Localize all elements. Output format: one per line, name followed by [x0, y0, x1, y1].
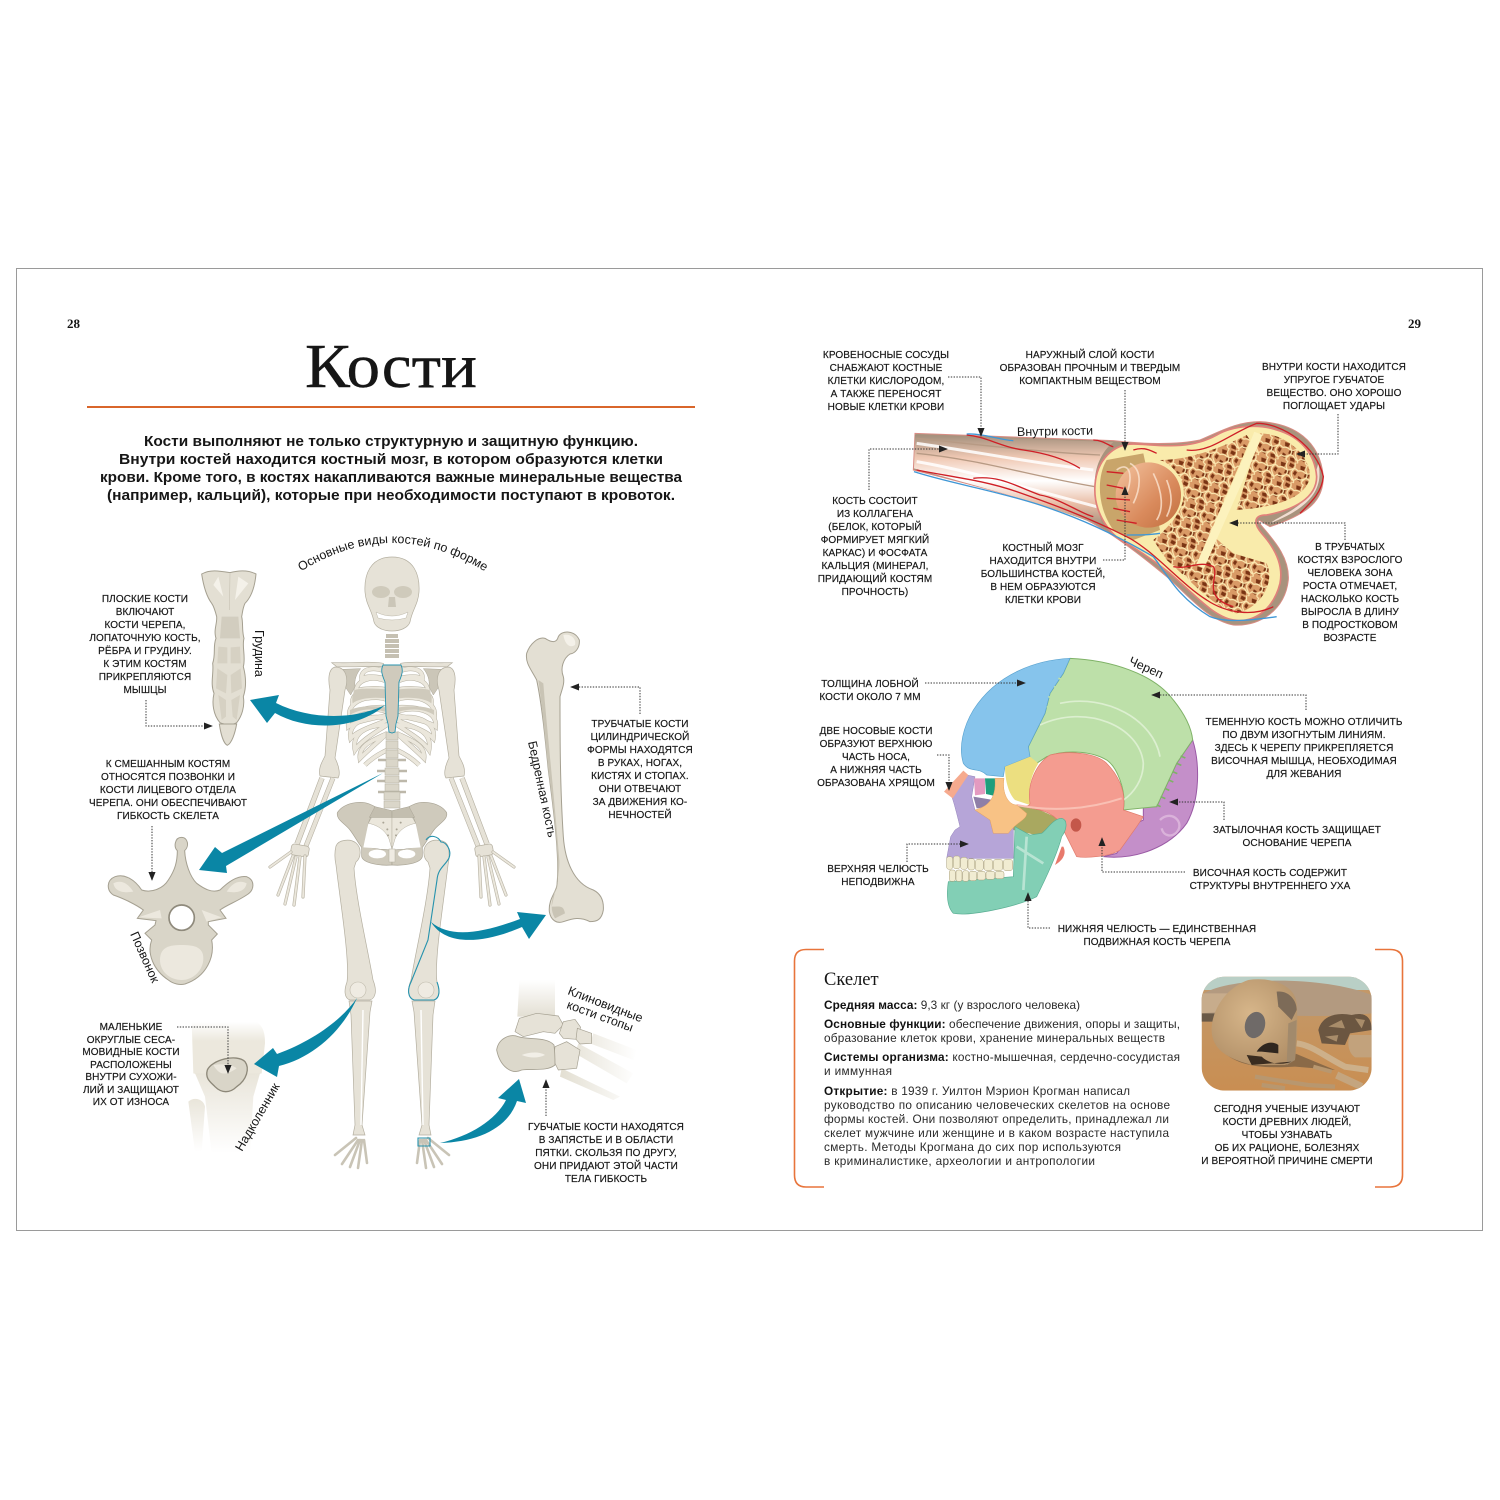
text: tubular bones: [587, 719, 693, 821]
panel facts text: и иммунная: [824, 1064, 892, 1078]
pubic symphysis: [389, 849, 395, 862]
text: collagen: ИЗ КОЛЛАГЕНА: [837, 509, 913, 520]
text: flat bones: МЫШЦЫ: [123, 685, 167, 696]
text: mixed bones: ОТНОСЯТСЯ ПОЗВОНКИ И: [101, 772, 235, 783]
leader: flat bones: [146, 700, 212, 726]
vessels: [917, 423, 1323, 612]
panel facts text: Открытие: в 1939 г. Уилтон Мэрион Крогман написал: [824, 1084, 1130, 1098]
panel facts text: формы костей. Они позволяют определить, принадлежал ли: [824, 1112, 1169, 1126]
panel heading: Скелет: [824, 970, 879, 990]
text: marrow: БОЛЬШИНСТВА КОСТЕЙ,: [981, 567, 1105, 580]
text: flat bones: ПЛОСКИЕ КОСТИ: [102, 594, 188, 605]
text: parietal bone: ДЛЯ ЖЕВАНИЯ: [1267, 769, 1341, 780]
intro text: Кости выполняют не только структурную и защитную функцию.: [144, 433, 638, 450]
text: sesamoid bones: РАСПОЛОЖЕНЫ: [90, 1060, 172, 1071]
text: growth zone: ВОЗРАСТЕ: [1323, 633, 1377, 644]
vertebra illustration: [108, 837, 253, 984]
leader: spongy bones: [545, 1080, 547, 1116]
text: blood vessels: [823, 350, 949, 413]
text: nasal bones: ОБРАЗОВАНА ХРЯЩОМ: [817, 778, 935, 789]
sternum highlighted: [382, 665, 402, 733]
text: mixed bones: [89, 759, 247, 822]
photo caption: И ВЕРОЯТНОЙ ПРИЧИНЕ СМЕРТИ: [1201, 1154, 1373, 1167]
text: sesamoid bones: [82, 1022, 180, 1108]
text: marrow: КЛЕТКИ КРОВИ: [1005, 595, 1081, 606]
arrow: sternum: [250, 695, 385, 725]
text: parietal bone: ВИСОЧНАЯ МЫШЦА, НЕОБХОДИМАЯ: [1211, 756, 1397, 767]
text: frontal bone: КОСТИ ОКОЛО 7 ММ: [819, 692, 921, 703]
text: mixed bones: КОСТИ ЛИЦЕВОГО ОТДЕЛА: [100, 785, 236, 796]
leader: maxilla: [907, 844, 968, 862]
text: flat bones: ПРИКРЕПЛЯЮТСЯ: [99, 672, 191, 683]
text: tubular bones: ЦИЛИНДРИЧЕСКОЙ: [591, 730, 689, 743]
leader: spongy substance: [1297, 414, 1338, 454]
leader: blood vessels: [948, 377, 981, 436]
text: spongy substance: ВНУТРИ КОСТИ НАХОДИТСЯ: [1262, 362, 1406, 373]
text: nasal bones: ОБРАЗУЮТ ВЕРХНЮЮ: [820, 739, 932, 750]
text: parietal bone: [1205, 717, 1403, 780]
photo: ancient skeleton: [1202, 977, 1372, 1091]
text: spongy bones: ТЕЛА ГИБКОСТЬ: [565, 1174, 647, 1185]
text: spongy bones: В ЗАПЯСТЬЕ И В ОБЛАСТИ: [539, 1135, 673, 1146]
intro text: Внутри костей находится костный мозг, в котором образуются клетки: [119, 451, 663, 468]
teeth: [947, 856, 1013, 881]
text: marrow: В НЕМ ОБРАЗУЮТСЯ: [990, 582, 1096, 593]
intro text: крови. Кроме того, в костях накапливаются важные минеральные вещества: [100, 469, 683, 486]
leader: marrow: [1103, 487, 1125, 560]
zygomatic bone: [975, 778, 1027, 833]
text: flat bones: К ЭТИМ КОСТЯМ: [103, 659, 187, 670]
frontal bone: [961, 658, 1070, 777]
cervical spine: [385, 636, 399, 656]
text: outer layer: [1000, 348, 1180, 387]
text: spongy substance: ПОГЛОЩАЕТ УДАРЫ: [1283, 401, 1385, 412]
label: inside the bone: Внутри кости: [1017, 424, 1093, 439]
text: tubular bones: В РУКАХ, НОГАХ,: [598, 758, 682, 769]
photo caption: КОСТИ ДРЕВНИХ ЛЮДЕЙ,: [1223, 1115, 1351, 1128]
label line 1: cuneiform bones: Клиновидные: [566, 984, 645, 1025]
text: nasal bones: ЧАСТЬ НОСА,: [842, 752, 910, 763]
text: collagen: КОСТЬ СОСТОИТ: [832, 496, 918, 507]
curved heading: bone shapes: Основные виды костей по форме: [298, 536, 487, 570]
intro text: [100, 433, 683, 504]
text: blood vessels: НОВЫЕ КЛЕТКИ КРОВИ: [828, 402, 944, 413]
leader: parietal bone: [1152, 695, 1306, 710]
full skeleton: [270, 557, 514, 1168]
text: collagen: [818, 496, 932, 598]
text: sesamoid bones: ОКРУГЛЫЕ СЕСА-: [87, 1035, 175, 1046]
spongy bone: [1153, 435, 1269, 613]
label: femur: Бедренная кость: [525, 740, 559, 839]
foot bones illustration: [497, 980, 637, 1100]
leader: collagen: [869, 449, 947, 490]
text: tubular bones: ЗА ДВИЖЕНИЯ КО-: [593, 797, 687, 808]
sphenoid bone: [1005, 757, 1038, 805]
bone outer body: [913, 422, 1323, 625]
text: occipital bone: [1213, 825, 1381, 849]
arrow: foot: [440, 1079, 526, 1143]
text: collagen: ПРОЧНОСТЬ): [842, 587, 908, 598]
text: outer layer: ОБРАЗОВАН ПРОЧНЫМ И ТВЕРДЫМ: [1000, 363, 1180, 374]
text: frontal bone: ТОЛЩИНА ЛОБНОЙ: [821, 677, 919, 690]
panel facts text: руководство по описанию человеческих скелетов на основе: [824, 1098, 1170, 1112]
leader: tubular bones: [571, 687, 640, 714]
text: occipital bone: ОСНОВАНИЕ ЧЕРЕПА: [1242, 838, 1352, 849]
text: flat bones: [89, 594, 201, 696]
leader: mandible: [1028, 893, 1050, 928]
text: tubular bones: КИСТЯХ И СТОПАХ.: [591, 771, 689, 782]
text: outer layer: КОМПАКТНЫМ ВЕЩЕСТВОМ: [1019, 376, 1161, 387]
panel facts text: образование клеток крови, хранение минеральных веществ: [824, 1031, 1165, 1045]
arrow: femur: [431, 912, 546, 940]
text: flat bones: ЛОПАТОЧНУЮ КОСТЬ,: [89, 633, 201, 644]
right bracket: [1375, 950, 1402, 1187]
text: tubular bones: ТРУБЧАТЫЕ КОСТИ: [591, 719, 689, 730]
text: occipital bone: ЗАТЫЛОЧНАЯ КОСТЬ ЗАЩИЩАЕТ: [1213, 825, 1381, 836]
photo caption: [1201, 1104, 1373, 1167]
text: growth zone: В ТРУБЧАТЫХ: [1315, 542, 1385, 553]
label: skull: Череп: [1127, 654, 1165, 681]
page number 28: 28: [67, 316, 80, 331]
femoral head: [1116, 462, 1181, 528]
text: mandible: [1058, 924, 1256, 948]
sternum bone illustration: [202, 571, 256, 745]
occipital bone: [1103, 740, 1198, 857]
title rule: [87, 406, 695, 408]
text: spongy bones: ОНИ ПРИДАЮТ ЭТОЙ ЧАСТИ: [534, 1159, 678, 1172]
label line 2: cuneiform bones: кости стопы: [565, 998, 635, 1035]
title: Кости: [305, 333, 477, 401]
text: flat bones: КОСТИ ЧЕРЕПА,: [104, 620, 186, 631]
text: sesamoid bones: ИХ ОТ ИЗНОСА: [93, 1097, 169, 1108]
knee illustration with patella: [188, 1022, 265, 1153]
text: growth zone: В ПОДРОСТКОВОМ: [1302, 620, 1398, 631]
panel facts text: смерть. Методы Крогмана до сих пор используются: [824, 1140, 1121, 1154]
text: tubular bones: ОНИ ОТВЕЧАЮТ: [599, 784, 681, 795]
bone cross-section illustration: [913, 422, 1323, 625]
photo caption: ОБ ИХ РАЦИОНЕ, БОЛЕЗНЯХ: [1215, 1143, 1360, 1154]
text: collagen: ПРИДАЮЩИЙ КОСТЯМ: [818, 572, 932, 585]
panel facts text: [824, 998, 1180, 1168]
left bracket: [794, 950, 824, 1187]
text: maxilla: НЕПОДВИЖНА: [841, 877, 915, 888]
page number 29: 29: [1408, 316, 1422, 331]
text: sesamoid bones: МАЛЕНЬКИЕ: [100, 1022, 163, 1033]
text: nasal bones: [817, 726, 935, 789]
text: outer layer: НАРУЖНЫЙ СЛОЙ КОСТИ: [1026, 348, 1154, 361]
text: growth zone: ЧЕЛОВЕКА ЗОНА: [1307, 568, 1393, 579]
text: marrow: КОСТНЫЙ МОЗГ: [1002, 541, 1084, 554]
text: spongy bones: ГУБЧАТЫЕ КОСТИ НАХОДЯТСЯ: [528, 1122, 684, 1133]
cut face: [1095, 426, 1317, 621]
text: mixed bones: ЧЕРЕПА. ОНИ ОБЕСПЕЧИВАЮТ: [89, 798, 247, 809]
text: growth zone: [1297, 542, 1403, 644]
leader: occipital bone: [1170, 802, 1224, 820]
text: spongy substance: УПРУГОЕ ГУБЧАТОЕ: [1284, 375, 1385, 386]
text: mandible: ПОДВИЖНАЯ КОСТЬ ЧЕРЕПА: [1083, 937, 1231, 948]
maxilla: [947, 775, 1013, 858]
text: sesamoid bones: ВНУТРИ СУХОЖИ-: [85, 1072, 177, 1083]
leader: nasal bones: [937, 755, 949, 790]
temporal bone: [1017, 753, 1143, 857]
text: spongy bones: ПЯТКИ. СКОЛЬЗЯ ПО ДРУГУ,: [535, 1148, 677, 1159]
label: patella: Надколенник: [232, 1080, 283, 1154]
text: mixed bones: ГИБКОСТЬ СКЕЛЕТА: [117, 811, 219, 822]
text: collagen: КАРКАС) И ФОСФАТА: [823, 548, 928, 559]
panel facts text: Основные функции: обеспечение движения, опоры и защиты,: [824, 1017, 1180, 1031]
text: collagen: (БЕЛОК, КОТОРЫЙ: [828, 520, 922, 533]
text: growth zone: НАСКОЛЬКО КОСТЬ: [1301, 594, 1399, 605]
skull illustration: [944, 658, 1198, 914]
text: marrow: НАХОДИТСЯ ВНУТРИ: [990, 556, 1096, 567]
text: blood vessels: А ТАКЖЕ ПЕРЕНОСЯТ: [831, 389, 941, 400]
text: marrow: [981, 541, 1105, 606]
leader: mixed bones: [151, 826, 153, 880]
text: growth zone: КОСТЯХ ВЗРОСЛОГО: [1297, 555, 1403, 566]
text: collagen: КАЛЬЦИЯ (МИНЕРАЛ,: [821, 561, 929, 572]
femur bone illustration: [526, 632, 603, 922]
text: maxilla: ВЕРХНЯЯ ЧЕЛЮСТЬ: [827, 864, 929, 875]
panel facts text: в криминалистике, археологии и антропологии: [824, 1154, 1095, 1168]
text: parietal bone: ЗДЕСЬ К ЧЕРЕПУ ПРИКРЕПЛЯЕТСЯ: [1215, 743, 1393, 754]
text: sesamoid bones: МОВИДНЫЕ КОСТИ: [82, 1047, 180, 1058]
text: tubular bones: НЕЧНОСТЕЙ: [608, 808, 672, 821]
text: frontal bone: [819, 677, 921, 703]
text: blood vessels: КЛЕТКИ КИСЛОРОДОМ,: [828, 376, 944, 387]
arrow: vertebra: [199, 773, 383, 873]
text: nasal bones: А НИЖНЯЯ ЧАСТЬ: [830, 765, 922, 776]
thoracic and lumbar spine: [377, 732, 407, 808]
mandible: [947, 818, 1066, 914]
text: temporal bone: ВИСОЧНАЯ КОСТЬ СОДЕРЖИТ: [1193, 868, 1347, 879]
text: maxilla: [827, 864, 929, 888]
text: tubular bones: ФОРМЫ НАХОДЯТСЯ: [587, 745, 693, 756]
leader: frontal bone: [925, 682, 1025, 684]
foot highlight: [418, 1138, 430, 1146]
nasal bone: [944, 771, 968, 798]
text: mixed bones: К СМЕШАННЫМ КОСТЯМ: [106, 759, 230, 770]
photo caption: СЕГОДНЯ УЧЕНЫЕ ИЗУЧАЮТ: [1214, 1104, 1360, 1115]
femur highlight: [409, 836, 450, 1000]
text: growth zone: ВЫРОСЛА В ДЛИНУ: [1301, 607, 1399, 618]
parietal bone: [1028, 658, 1193, 810]
leader: growth zone: [1230, 523, 1345, 540]
text: temporal bone: СТРУКТУРЫ ВНУТРЕННЕГО УХА: [1190, 881, 1351, 892]
patella: [207, 1058, 247, 1092]
page frame: [16, 268, 1482, 1230]
compact ring: [1100, 453, 1160, 540]
text: growth zone: РОСТА ОТМЕЧАЕТ,: [1303, 581, 1397, 592]
panel facts text: скелет мужчине или женщине и в каком возрасте наступила: [824, 1126, 1169, 1140]
text: spongy bones: [528, 1122, 684, 1185]
pale underside of neck: [1270, 463, 1320, 523]
orbit: [973, 797, 993, 808]
shaft: [914, 435, 1113, 527]
text: flat bones: РЁБРА И ГРУДИНУ.: [98, 645, 192, 657]
arrow: patella: [254, 998, 357, 1077]
label: sternum: Грудина: [252, 630, 266, 677]
leader: outer layer: [1124, 390, 1126, 450]
olive gap behind cheek: [1013, 805, 1062, 837]
label: vertebra: Позвонок: [127, 930, 162, 985]
photo caption: ЧТОБЫ УЗНАВАТЬ: [1242, 1130, 1333, 1141]
text: blood vessels: КРОВЕНОСНЫЕ СОСУДЫ: [823, 350, 949, 361]
text: spongy substance: ВЕЩЕСТВО. ОНО ХОРОШО: [1267, 388, 1402, 399]
text: sesamoid bones: ЛИЙ И ЗАЩИЩАЮТ: [83, 1083, 179, 1096]
leader: sesamoid bones: [177, 1027, 228, 1073]
panel facts text: Средняя масса: 9,3 кг (у взрослого человека): [824, 998, 1080, 1012]
text: spongy substance: [1262, 362, 1406, 412]
text: mandible: НИЖНЯЯ ЧЕЛЮСТЬ — ЕДИНСТВЕННАЯ: [1058, 924, 1256, 935]
text: nasal bones: ДВЕ НОСОВЫЕ КОСТИ: [819, 726, 933, 737]
text: flat bones: ВКЛЮЧАЮТ: [116, 607, 174, 618]
text: collagen: ФОРМИРУЕТ МЯГКИЙ: [821, 533, 929, 546]
skull: [365, 557, 419, 631]
text: parietal bone: ТЕМЕННУЮ КОСТЬ МОЖНО ОТЛИЧИТЬ: [1205, 717, 1403, 728]
text: temporal bone: [1190, 868, 1351, 892]
growth plate: [1200, 433, 1258, 567]
panel: skeleton facts: [794, 950, 1402, 1187]
intro text: (например, кальций), которые при необходимости поступают в кровоток.: [107, 487, 675, 504]
text: parietal bone: ПО ДВУМ ИЗОГНУТЫМ ЛИНИЯМ.: [1222, 730, 1386, 741]
panel facts text: Системы организма: костно-мышечная, сердечно-сосудистая: [824, 1050, 1180, 1064]
leader: temporal bone: [1102, 838, 1185, 872]
text: blood vessels: СНАБЖАЮТ КОСТНЫЕ: [830, 363, 943, 374]
